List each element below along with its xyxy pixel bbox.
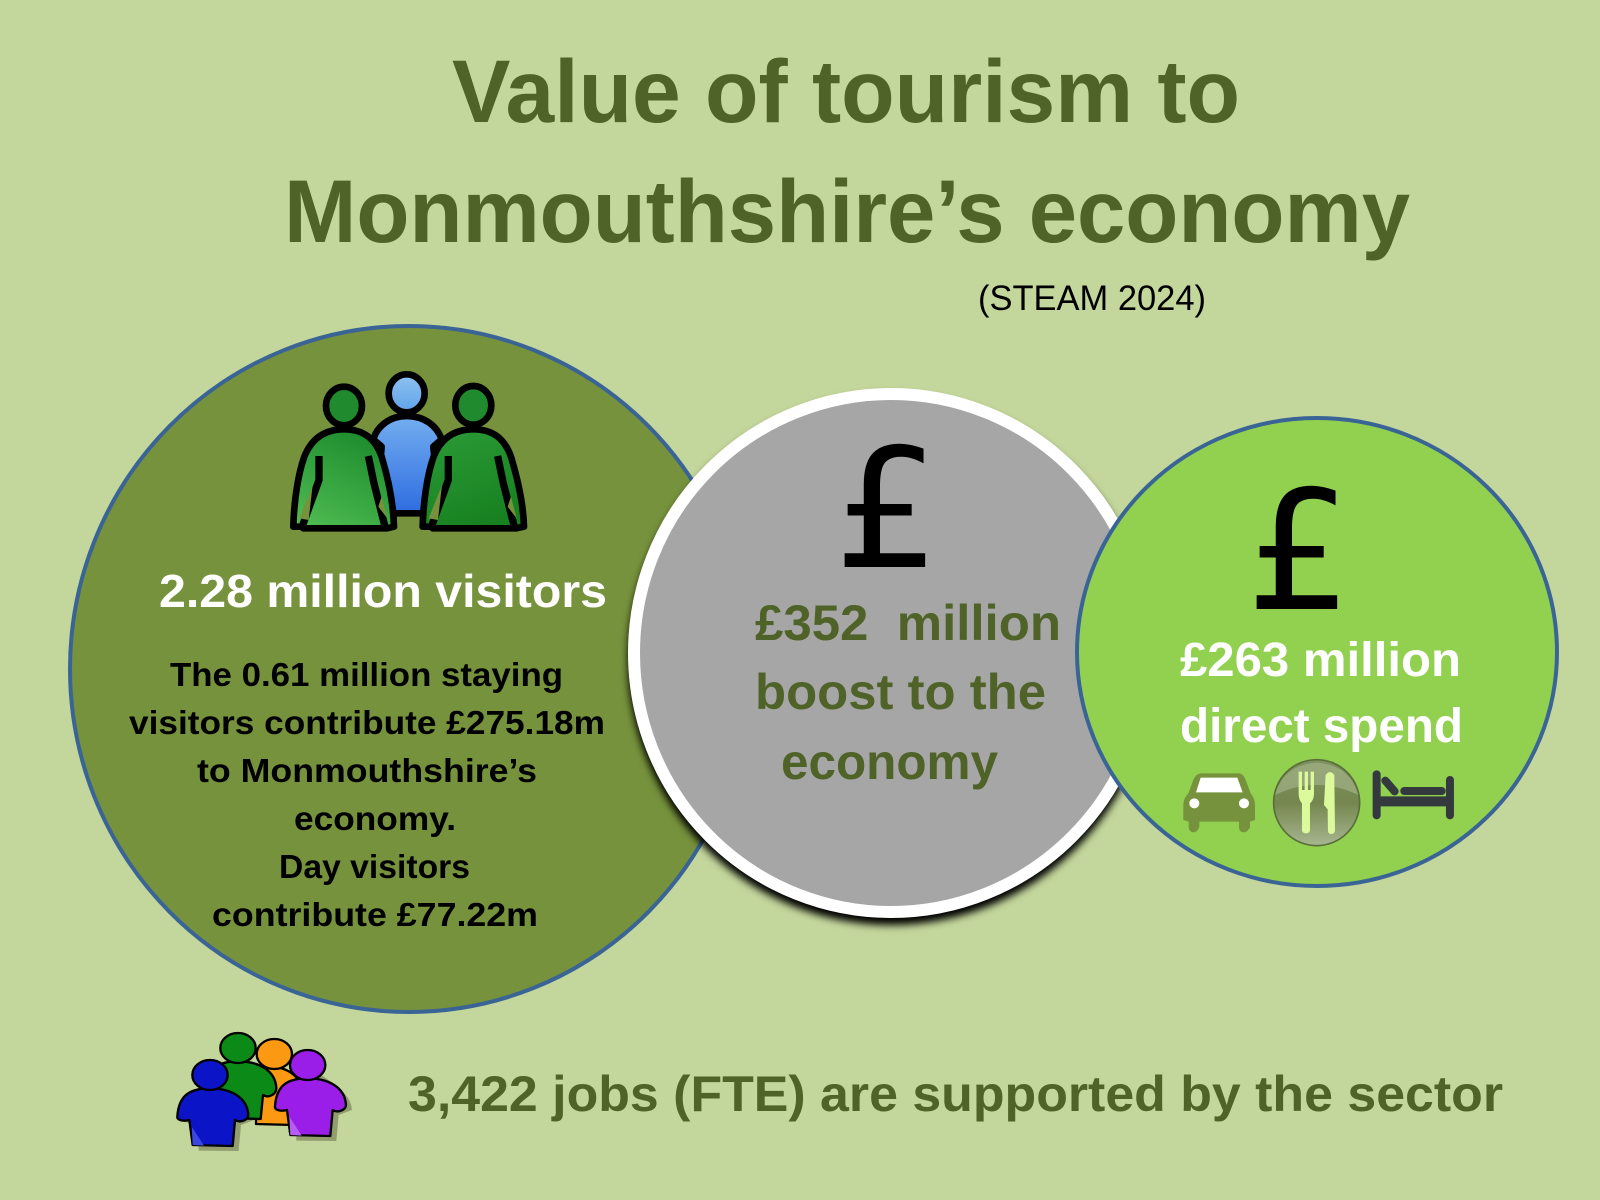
- icon: three people: [293, 374, 524, 528]
- icon: fork and knife: [1274, 760, 1360, 846]
- icon: bed: [1377, 774, 1450, 815]
- visitors description: [129, 656, 605, 933]
- title: [284, 41, 1410, 261]
- boost text: boost to the: [755, 664, 1046, 720]
- direct spend text: £263 million: [1180, 634, 1461, 687]
- visitors description: The 0.61 million staying: [170, 656, 563, 693]
- jobs statement: 3,422 jobs (FTE) are supported by the sector: [408, 1066, 1503, 1122]
- green figure: [205, 1033, 276, 1119]
- title: Monmouthshire’s economy: [284, 161, 1410, 261]
- direct spend text: [1180, 634, 1463, 753]
- purple figure: [275, 1050, 346, 1136]
- title: Value of tourism to: [452, 41, 1240, 141]
- icon: group of workers: [177, 1033, 352, 1151]
- panel: economy boost circle: [628, 394, 1154, 925]
- direct spend text: direct spend: [1180, 700, 1463, 753]
- panel: direct spend circle: [1077, 418, 1557, 886]
- orange figure: [253, 1039, 302, 1125]
- source note: (STEAM 2024): [978, 279, 1206, 318]
- visitors description: to Monmouthshire’s: [197, 752, 537, 789]
- visitors description: Day visitors: [279, 848, 470, 885]
- visitors headline: 2.28 million visitors: [159, 565, 607, 617]
- icon: pound sign: £: [834, 414, 940, 607]
- panel: visitors circle: [70, 326, 748, 1012]
- boost text: economy: [781, 734, 998, 790]
- boost text: £352 million: [755, 595, 1061, 651]
- icon: car: [1183, 773, 1255, 832]
- icon: pound sign: £: [1246, 456, 1352, 649]
- visitors description: contribute £77.22m: [212, 896, 538, 933]
- boost text: [755, 595, 1061, 790]
- visitors description: economy.: [294, 800, 456, 837]
- visitors description: visitors contribute £275.18m: [129, 704, 605, 741]
- blue figure: [177, 1060, 248, 1146]
